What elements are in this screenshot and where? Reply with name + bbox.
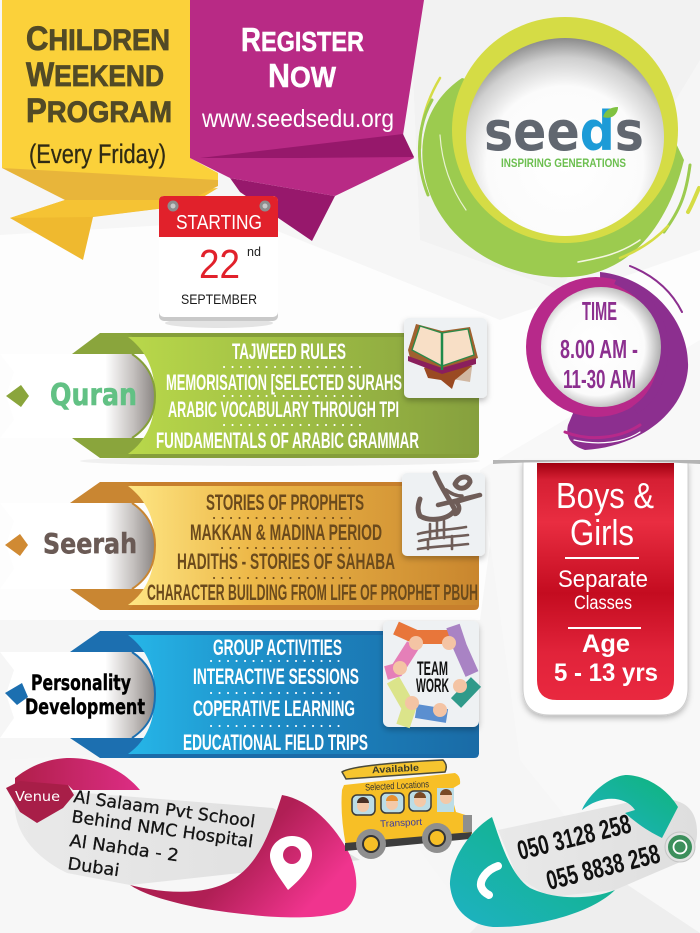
icon: open quran on stand	[404, 318, 487, 398]
panel: boys and girls card: Age	[582, 630, 630, 658]
list: seerah topics: MAKKAN & MADINA PERIOD	[190, 520, 382, 545]
banner: magenta register ribbon	[190, 0, 424, 241]
list: seerah topics	[147, 490, 478, 605]
label: personality development: Personality	[31, 671, 131, 695]
text: phone numbers	[514, 809, 663, 896]
calendar: starting date	[159, 196, 278, 328]
list: personality topics: INTERACTIVE SESSIONS	[193, 664, 359, 689]
panel: seerah ribbon	[0, 473, 485, 610]
text: venue address: Al Nahda - 2	[68, 831, 180, 866]
icon: team work hands	[383, 621, 479, 727]
calendar: starting date: nd	[247, 244, 261, 259]
time badge: TIME	[582, 296, 617, 326]
text: venue address: Dubai	[66, 854, 121, 881]
text: venue address: Al Salaam Pvt School	[72, 787, 256, 832]
icon: calligraphy	[402, 473, 485, 556]
text: phone numbers: 050 3128 258	[514, 809, 634, 866]
icon: team work hands: WORK	[416, 676, 449, 697]
text: venue address	[66, 787, 256, 881]
text: website: www.seedsedu.org	[201, 105, 394, 133]
heading: register now: NOW	[268, 57, 337, 94]
text: every friday: (Every Friday)	[29, 139, 166, 169]
time badge: 11-30 AM	[563, 364, 636, 394]
label: quran: Quran	[50, 378, 137, 413]
panel: personality development ribbon	[0, 621, 479, 758]
logo wordmark: INSPIRING GENERATIONS	[501, 158, 626, 170]
time badge: 8.00 AM -	[560, 334, 638, 364]
icon: school bus: Transport	[380, 817, 423, 830]
heading: children weekend program: WEEKEND	[26, 56, 164, 94]
label: personality development: Development	[25, 695, 145, 719]
list: seerah topics: STORIES OF PROPHETS	[206, 490, 364, 515]
list: quran topics: ARABIC VOCABULARY THROUGH TPI	[168, 397, 399, 422]
panel: boys and girls card: Classes	[574, 593, 632, 614]
heading: register now: REGISTER	[241, 21, 364, 58]
panel: boys and girls card: Boys &	[556, 475, 654, 516]
list: personality topics	[183, 635, 368, 755]
calendar: starting date: STARTING	[176, 212, 262, 234]
panel: quran ribbon	[0, 318, 487, 466]
icon: team work hands: TEAM	[417, 659, 448, 680]
logo wordmark: seeds	[484, 100, 644, 163]
text: venue label: Venue	[15, 790, 60, 805]
icon: phone handset	[481, 866, 498, 895]
text: venue address: Behind NMC Hospital	[70, 807, 254, 852]
time badge	[526, 266, 688, 450]
panel: boys and girls card: 5 - 13 yrs	[554, 659, 658, 687]
diamond	[6, 385, 29, 407]
heading: children weekend program	[26, 20, 172, 130]
list: seerah topics: HADITHS - STORIES OF SAHABA	[177, 549, 395, 574]
list: quran topics	[156, 339, 419, 453]
diamond	[5, 683, 28, 705]
list: quran topics: FUNDAMENTALS OF ARABIC GRAMMAR	[156, 428, 419, 453]
logo badge: seeds	[419, 17, 699, 277]
list: personality topics: GROUP ACTIVITIES	[213, 635, 342, 660]
panel: boys and girls card	[493, 460, 700, 715]
icon: school bus	[342, 760, 472, 859]
heading: children weekend program: PROGRAM	[26, 92, 172, 130]
banner: yellow title ribbon	[2, 0, 218, 260]
calendar: starting date: 22	[199, 241, 240, 287]
panel: boys and girls card: Separate	[558, 566, 648, 593]
phone banner	[450, 775, 697, 927]
list: quran topics: MEMORISATION [SELECTED SURAHS	[166, 370, 402, 395]
list: personality topics: COPERATIVE LEARNING	[193, 696, 355, 721]
diamond	[5, 534, 28, 556]
icon: location pin	[270, 836, 312, 890]
label: seerah: Seerah	[43, 527, 137, 560]
venue banner	[6, 758, 360, 917]
heading: register now	[241, 21, 364, 94]
icon: whatsapp	[665, 832, 695, 862]
heading: children weekend program: CHILDREN	[26, 20, 170, 58]
icon: school bus: Available	[372, 763, 419, 776]
calendar: starting date: SEPTEMBER	[181, 291, 257, 307]
icon: school bus: Selected Locations	[365, 779, 429, 794]
list: quran topics: TAJWEED RULES	[232, 339, 346, 364]
list: personality topics: EDUCATIONAL FIELD TRIPS	[183, 730, 368, 755]
label: personality development	[25, 671, 145, 719]
panel: boys and girls card: Girls	[570, 512, 634, 553]
